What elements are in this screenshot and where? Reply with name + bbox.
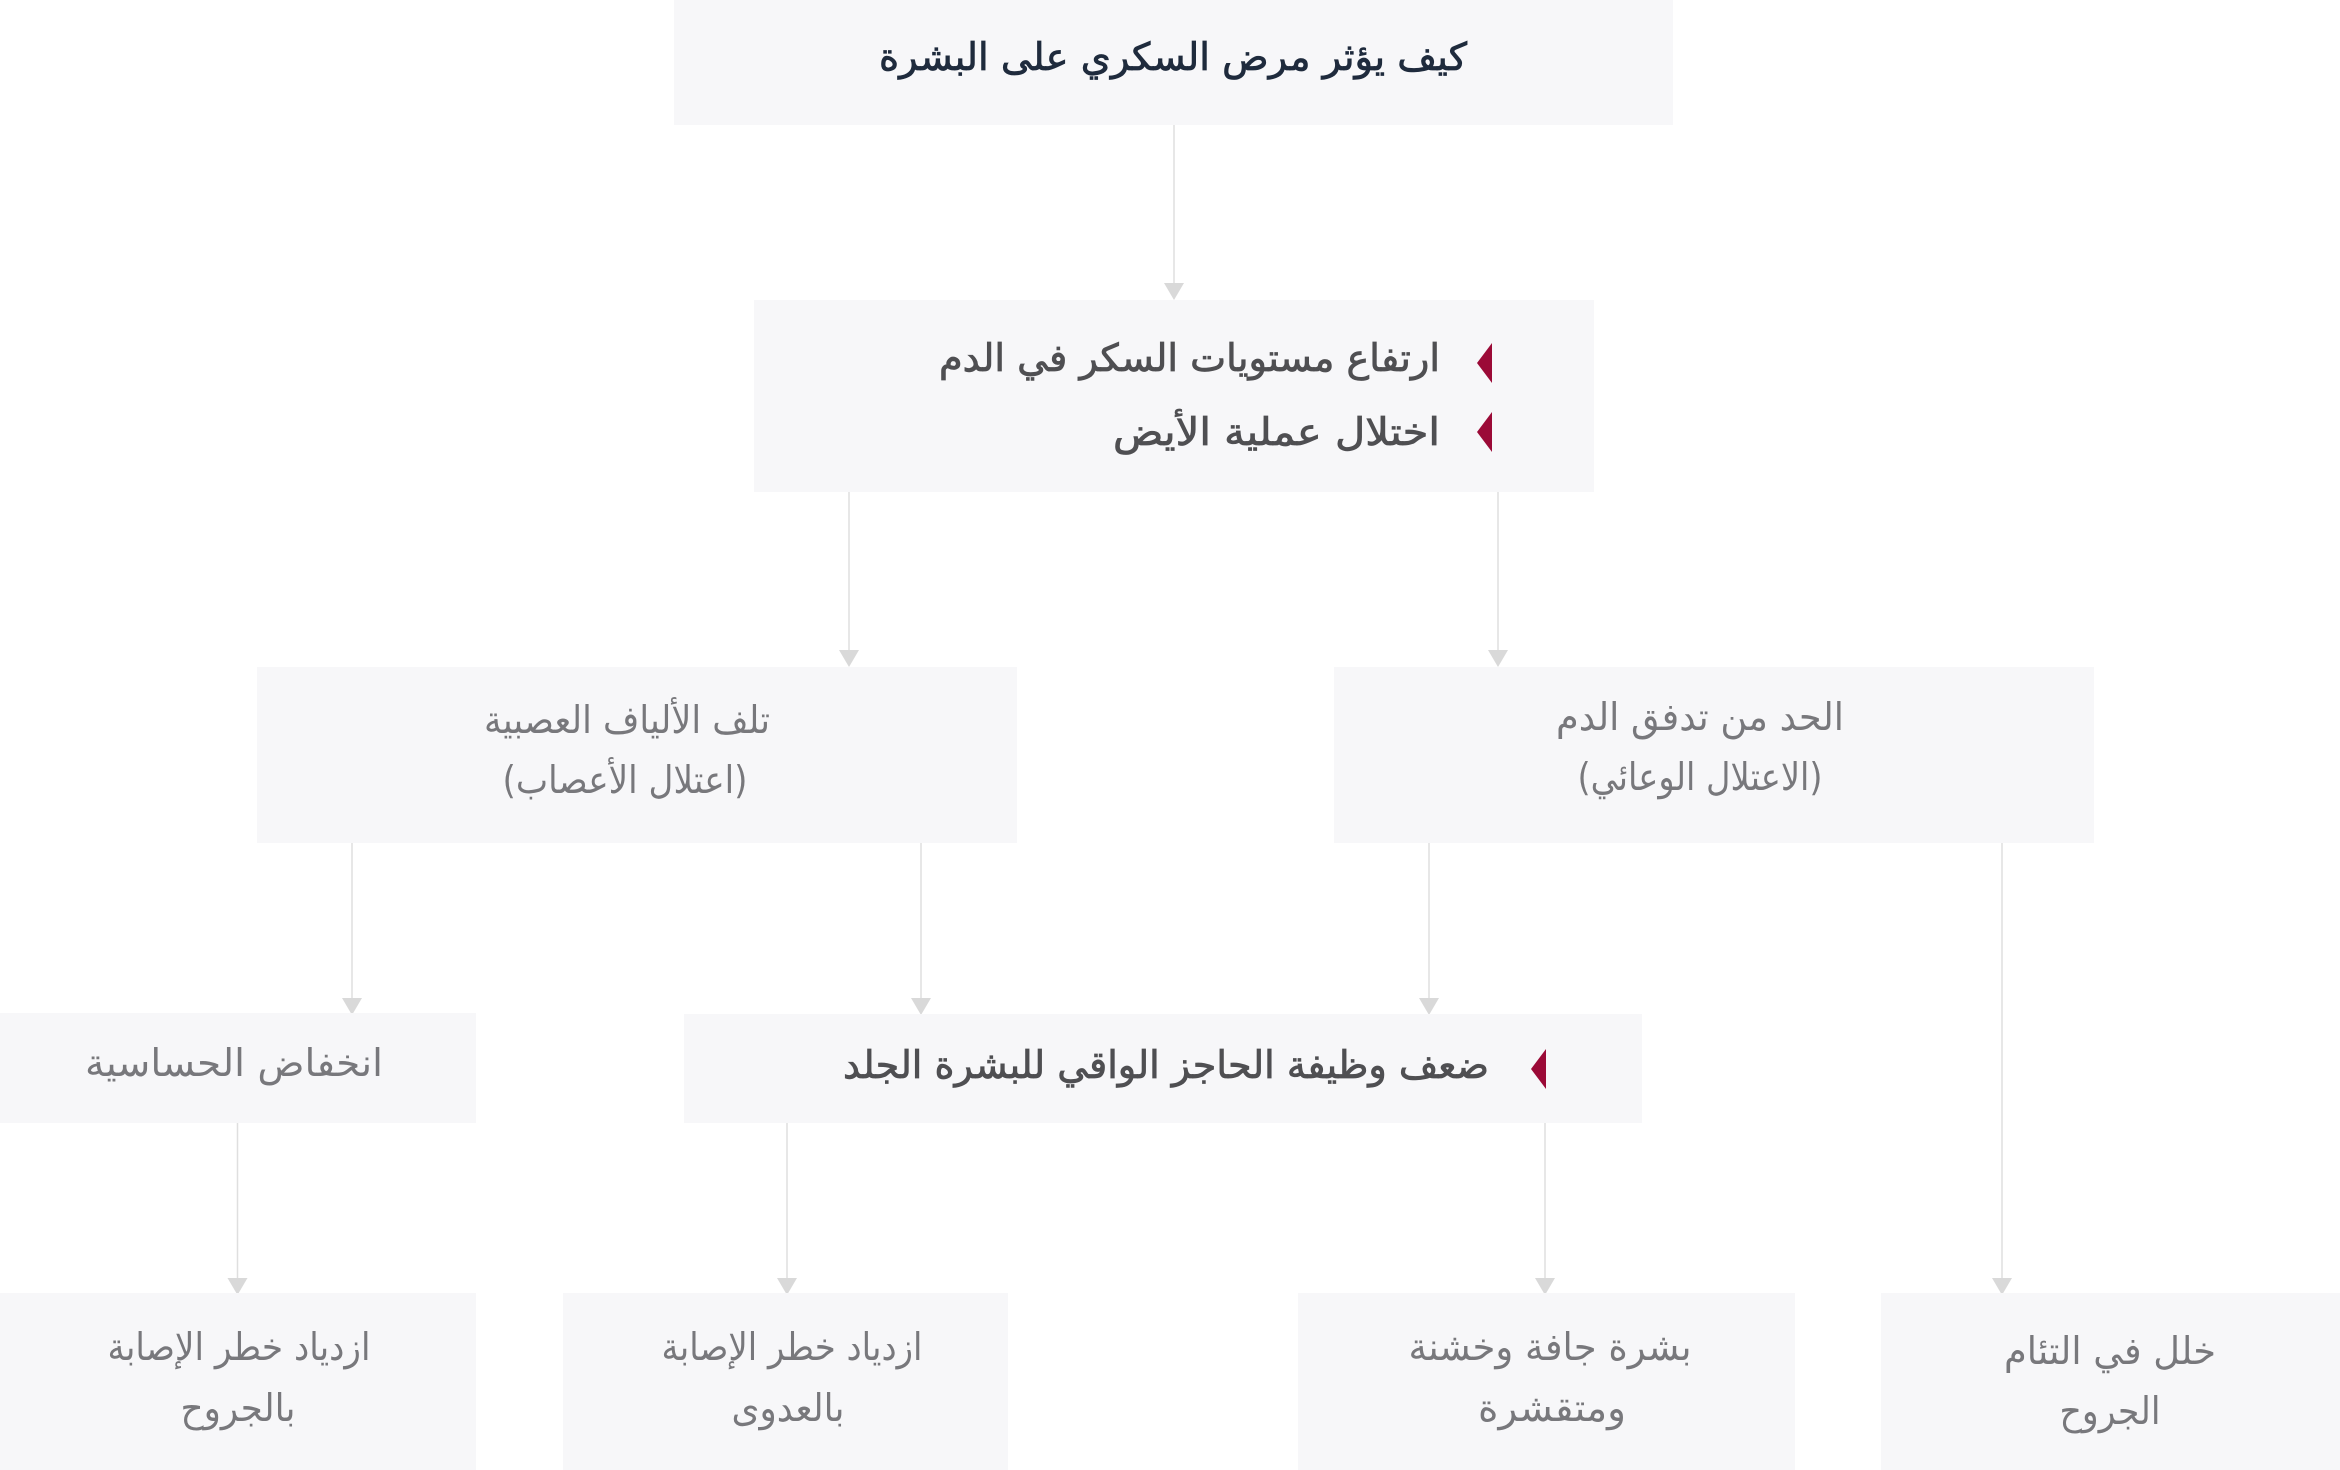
- arrow: barrier to infection risk: [777, 1123, 797, 1295]
- text: nerve damage line 1: تلف الألياف العصبية: [484, 696, 770, 742]
- arrow: nerve damage to weakened barrier: [911, 843, 931, 1015]
- text: nerve damage line 2: (اعتلال الأعصاب): [502, 756, 748, 802]
- arrow: nerve damage to reduced sensation: [342, 843, 362, 1015]
- arrow: barrier to dry skin: [1535, 1123, 1555, 1295]
- panel: wound injury risk: [0, 1293, 476, 1470]
- text: impaired healing line 2: الجروح: [2060, 1389, 2160, 1434]
- panel: nerve damage: [257, 667, 1017, 843]
- arrow: blood flow to impaired healing: [1992, 843, 2012, 1295]
- panel: reduced blood flow: [1334, 667, 2094, 843]
- panel: root causes: [754, 300, 1594, 492]
- text: impaired healing line 1: خلل في التئام: [2004, 1329, 2216, 1373]
- text: high blood sugar: ارتفاع مستويات السكر في الدم: [939, 336, 1440, 381]
- arrow: causes to reduced blood flow: [1488, 492, 1508, 667]
- text: skin barrier: ضعف وظيفة الحاجز الواقي للبشرة الجلد: [843, 1043, 1489, 1088]
- arrow: title to causes: [1164, 125, 1184, 300]
- arrow: causes to nerve damage: [839, 492, 859, 667]
- panel: weakened skin barrier: [684, 1014, 1642, 1123]
- text: wound injury risk line 2: بالجروح: [180, 1386, 296, 1431]
- text: reduced sensation: انخفاض الحساسية: [85, 1041, 383, 1086]
- arrow: blood flow to weakened barrier: [1419, 843, 1439, 1015]
- text: infection risk line 1: ازدياد خطر الإصابة: [662, 1325, 922, 1370]
- text: metabolism disorder: اختلال عملية الأيض: [1113, 408, 1440, 455]
- text: blood flow line 2: (الاعتلال الوعائي): [1578, 755, 1822, 800]
- text: blood flow line 1: الحد من تدفق الدم: [1556, 695, 1844, 740]
- bullet: high blood sugar: [1477, 343, 1492, 383]
- panel: impaired wound healing: [1881, 1293, 2340, 1470]
- panel: infection risk: [563, 1293, 1008, 1470]
- text: wound injury risk line 1: ازدياد خطر الإصابة: [108, 1325, 370, 1370]
- heading: كيف يؤثر مرض السكري على البشرة: [879, 35, 1468, 80]
- arrow: reduced sensation to wound injury risk: [228, 1123, 248, 1295]
- text: dry skin line 1: بشرة جافة وخشنة: [1408, 1325, 1692, 1370]
- bullet: metabolism disorder: [1477, 412, 1492, 452]
- panel: reduced sensation: [0, 1013, 476, 1123]
- text: dry skin line 2: ومتقشرة: [1478, 1386, 1626, 1431]
- panel: dry rough skin: [1298, 1293, 1795, 1470]
- bullet: skin barrier: [1531, 1049, 1546, 1089]
- text: infection risk line 2: بالعدوى: [732, 1386, 844, 1431]
- panel: title: [674, 0, 1673, 125]
